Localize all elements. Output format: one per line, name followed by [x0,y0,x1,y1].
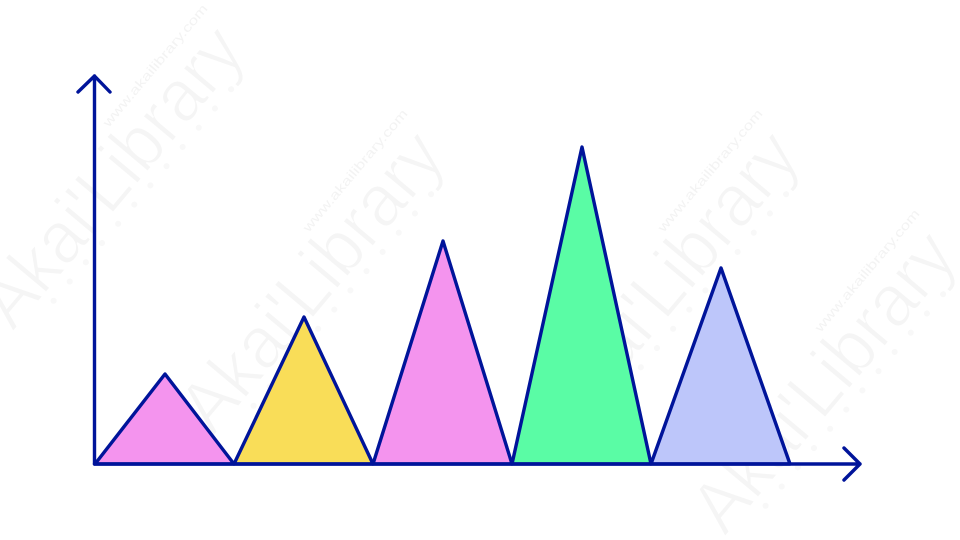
watermark: top left: www.akailibrary.com [99,1,211,131]
watermark: centre right: www.akailibrary.com [654,106,766,236]
watermark: bottom right: www.akailibrary.com [811,206,923,336]
triangle 2: yellow [234,317,373,464]
triangle 3: pink [373,241,512,464]
watermark: centre left: Akai'Library [162,114,460,447]
watermark: centre left: www.akailibrary.com [299,106,411,236]
triangle 1: pink [95,374,234,464]
y axis arrow [78,76,110,464]
watermark: centre right: Akai'Library [517,114,815,447]
triangle 4: green [512,147,651,464]
x axis arrow [94,448,860,480]
triangle 5: periwinkle [651,268,790,464]
